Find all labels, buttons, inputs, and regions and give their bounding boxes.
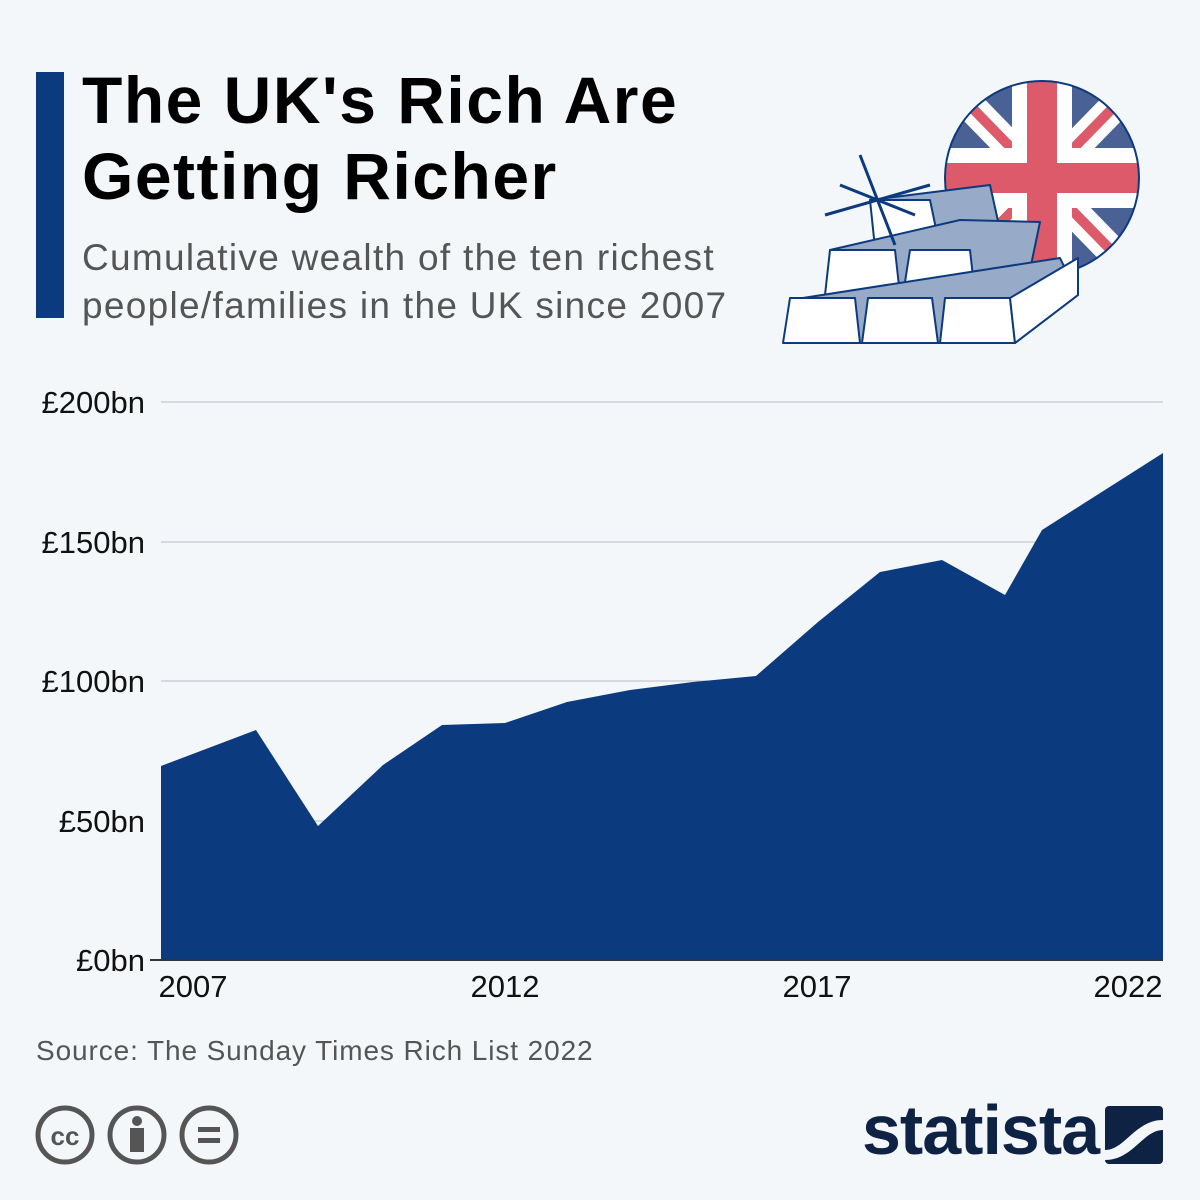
area chart (42, 385, 1163, 1004)
title (82, 63, 678, 213)
area chart: 2012 (471, 969, 539, 1004)
area chart: £150bn (42, 525, 145, 560)
area chart: £100bn (42, 664, 145, 699)
subtitle (82, 237, 727, 326)
source: Source: The Sunday Times Rich List 2022 (36, 1035, 594, 1066)
license icons: cc (51, 1121, 79, 1151)
title: Getting Richer (82, 139, 558, 213)
title accent bar (36, 72, 64, 318)
statista logo: statista (862, 1091, 1099, 1169)
area chart: 2022 (1094, 969, 1162, 1004)
area chart: 2007 (159, 969, 227, 1004)
area chart: £200bn (42, 385, 145, 420)
area chart: £0bn (76, 943, 145, 978)
title: The UK's Rich Are (82, 63, 678, 137)
subtitle: Cumulative wealth of the ten richest (82, 237, 715, 278)
license icons (36, 1106, 238, 1164)
area chart: £50bn (59, 804, 145, 839)
area chart: 2017 (783, 969, 851, 1004)
subtitle: people/families in the UK since 2007 (82, 285, 727, 326)
illustration: gold bars and UK flag (782, 80, 1140, 344)
